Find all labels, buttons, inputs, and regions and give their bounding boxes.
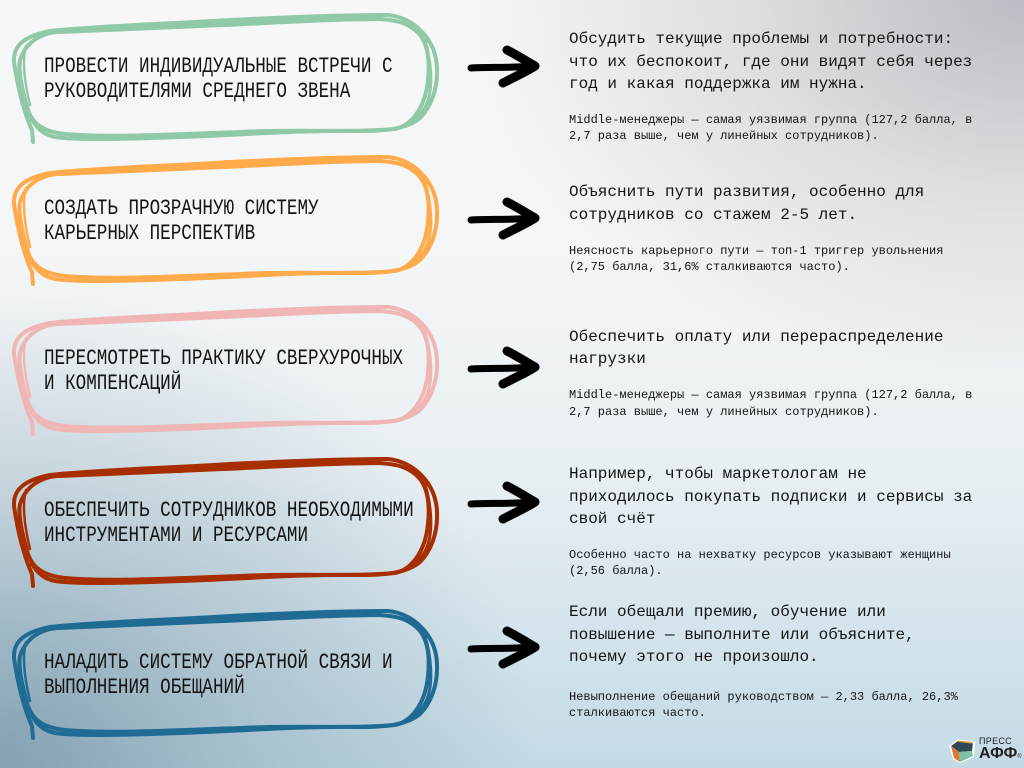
text block 3: Обеспечить оплату или перераспределение нагрузки <box>569 328 943 368</box>
text block 5: Если обещали премию, обучение или повышение — выполните или объясните, почему этого не произошло. <box>569 603 915 666</box>
arrow 1 <box>468 46 540 88</box>
text block 1: Обсудить текущие проблемы и потребности: что их беспокоит, где они видят себя через год и какая поддержка им нужна. <box>569 30 972 93</box>
heading: frame 1 text: ПРОВЕСТИ ИНДИВИДУАЛЬНЫЕ ВСТРЕЧИ С РУКОВОДИТЕЛЯМИ СРЕДНЕГО ЗВЕНА <box>44 54 393 104</box>
heading: frame 5 text: НАЛАДИТЬ СИСТЕМУ ОБРАТНОЙ СВЯЗИ И ВЫПОЛНЕНИЯ ОБЕЩАНИЙ <box>44 650 393 700</box>
text block 1: Middle-менеджеры — самая уязвимая группа (127,2 балла, в 2,7 раза выше, чем у линейных сотрудников). <box>569 113 972 143</box>
logo wordmark <box>979 736 1022 762</box>
arrow 3 <box>468 346 540 388</box>
text block 4 <box>569 465 972 578</box>
heading: frame 4 text: ОБЕСПЕЧИТЬ СОТРУДНИКОВ НЕОБХОДИМЫМИ ИНСТРУМЕНТАМИ И РЕСУРСАМИ <box>44 498 414 548</box>
text block 2: Объяснить пути развития, особенно для сотрудников со стажем 2-5 лет. <box>569 183 924 224</box>
text block 5 <box>569 603 958 720</box>
heading: frame 2 text: СОЗДАТЬ ПРОЗРАЧНУЮ СИСТЕМУ КАРЬЕРНЫХ ПЕРСПЕКТИВ <box>44 196 319 246</box>
logo: ПРЕСС АФФ <box>949 736 1022 763</box>
arrow 4 <box>468 482 540 524</box>
text block 3 <box>569 328 972 419</box>
heading: frame 3 text: ПЕРЕСМОТРЕТЬ ПРАКТИКУ СВЕРХУРОЧНЫХ И КОМПЕНСАЦИЙ <box>44 346 403 396</box>
logo wordmark: ПРЕСС <box>979 736 1012 746</box>
text block 4: Особенно часто на нехватку ресурсов указывают женщины (2,56 балла). <box>569 548 951 578</box>
arrow 2 <box>468 198 540 240</box>
panel: frame 2, career transparency <box>12 155 440 286</box>
panel: frame 4, tools and resources <box>12 457 440 588</box>
text block 3: Middle-менеджеры — самая уязвимая группа (127,2 балла, в 2,7 раза выше, чем у линейных сотрудников). <box>569 388 972 419</box>
text block 5: Невыполнение обещаний руководством — 2,33 балла, 26,3% сталкиваются часто. <box>569 690 958 720</box>
text block 2: Неясность карьерного пути — топ-1 триггер увольнения (2,75 балла, 31,6% сталкиваются часто). <box>569 244 943 274</box>
text block 1 <box>569 30 972 143</box>
text block 2 <box>569 183 943 274</box>
panel: frame 5, feedback and promises <box>12 609 440 740</box>
panel: frame 3, overtime and compensation <box>12 305 440 436</box>
panel: frame 1, individual meetings <box>12 13 440 144</box>
arrow 5 <box>468 626 540 668</box>
text block 4: Например, чтобы маркетологам не приходилось покупать подписки и сервисы за свой счёт <box>569 465 972 528</box>
logo wordmark: АФФ® <box>979 745 1022 762</box>
icon: logo cube <box>949 739 975 763</box>
